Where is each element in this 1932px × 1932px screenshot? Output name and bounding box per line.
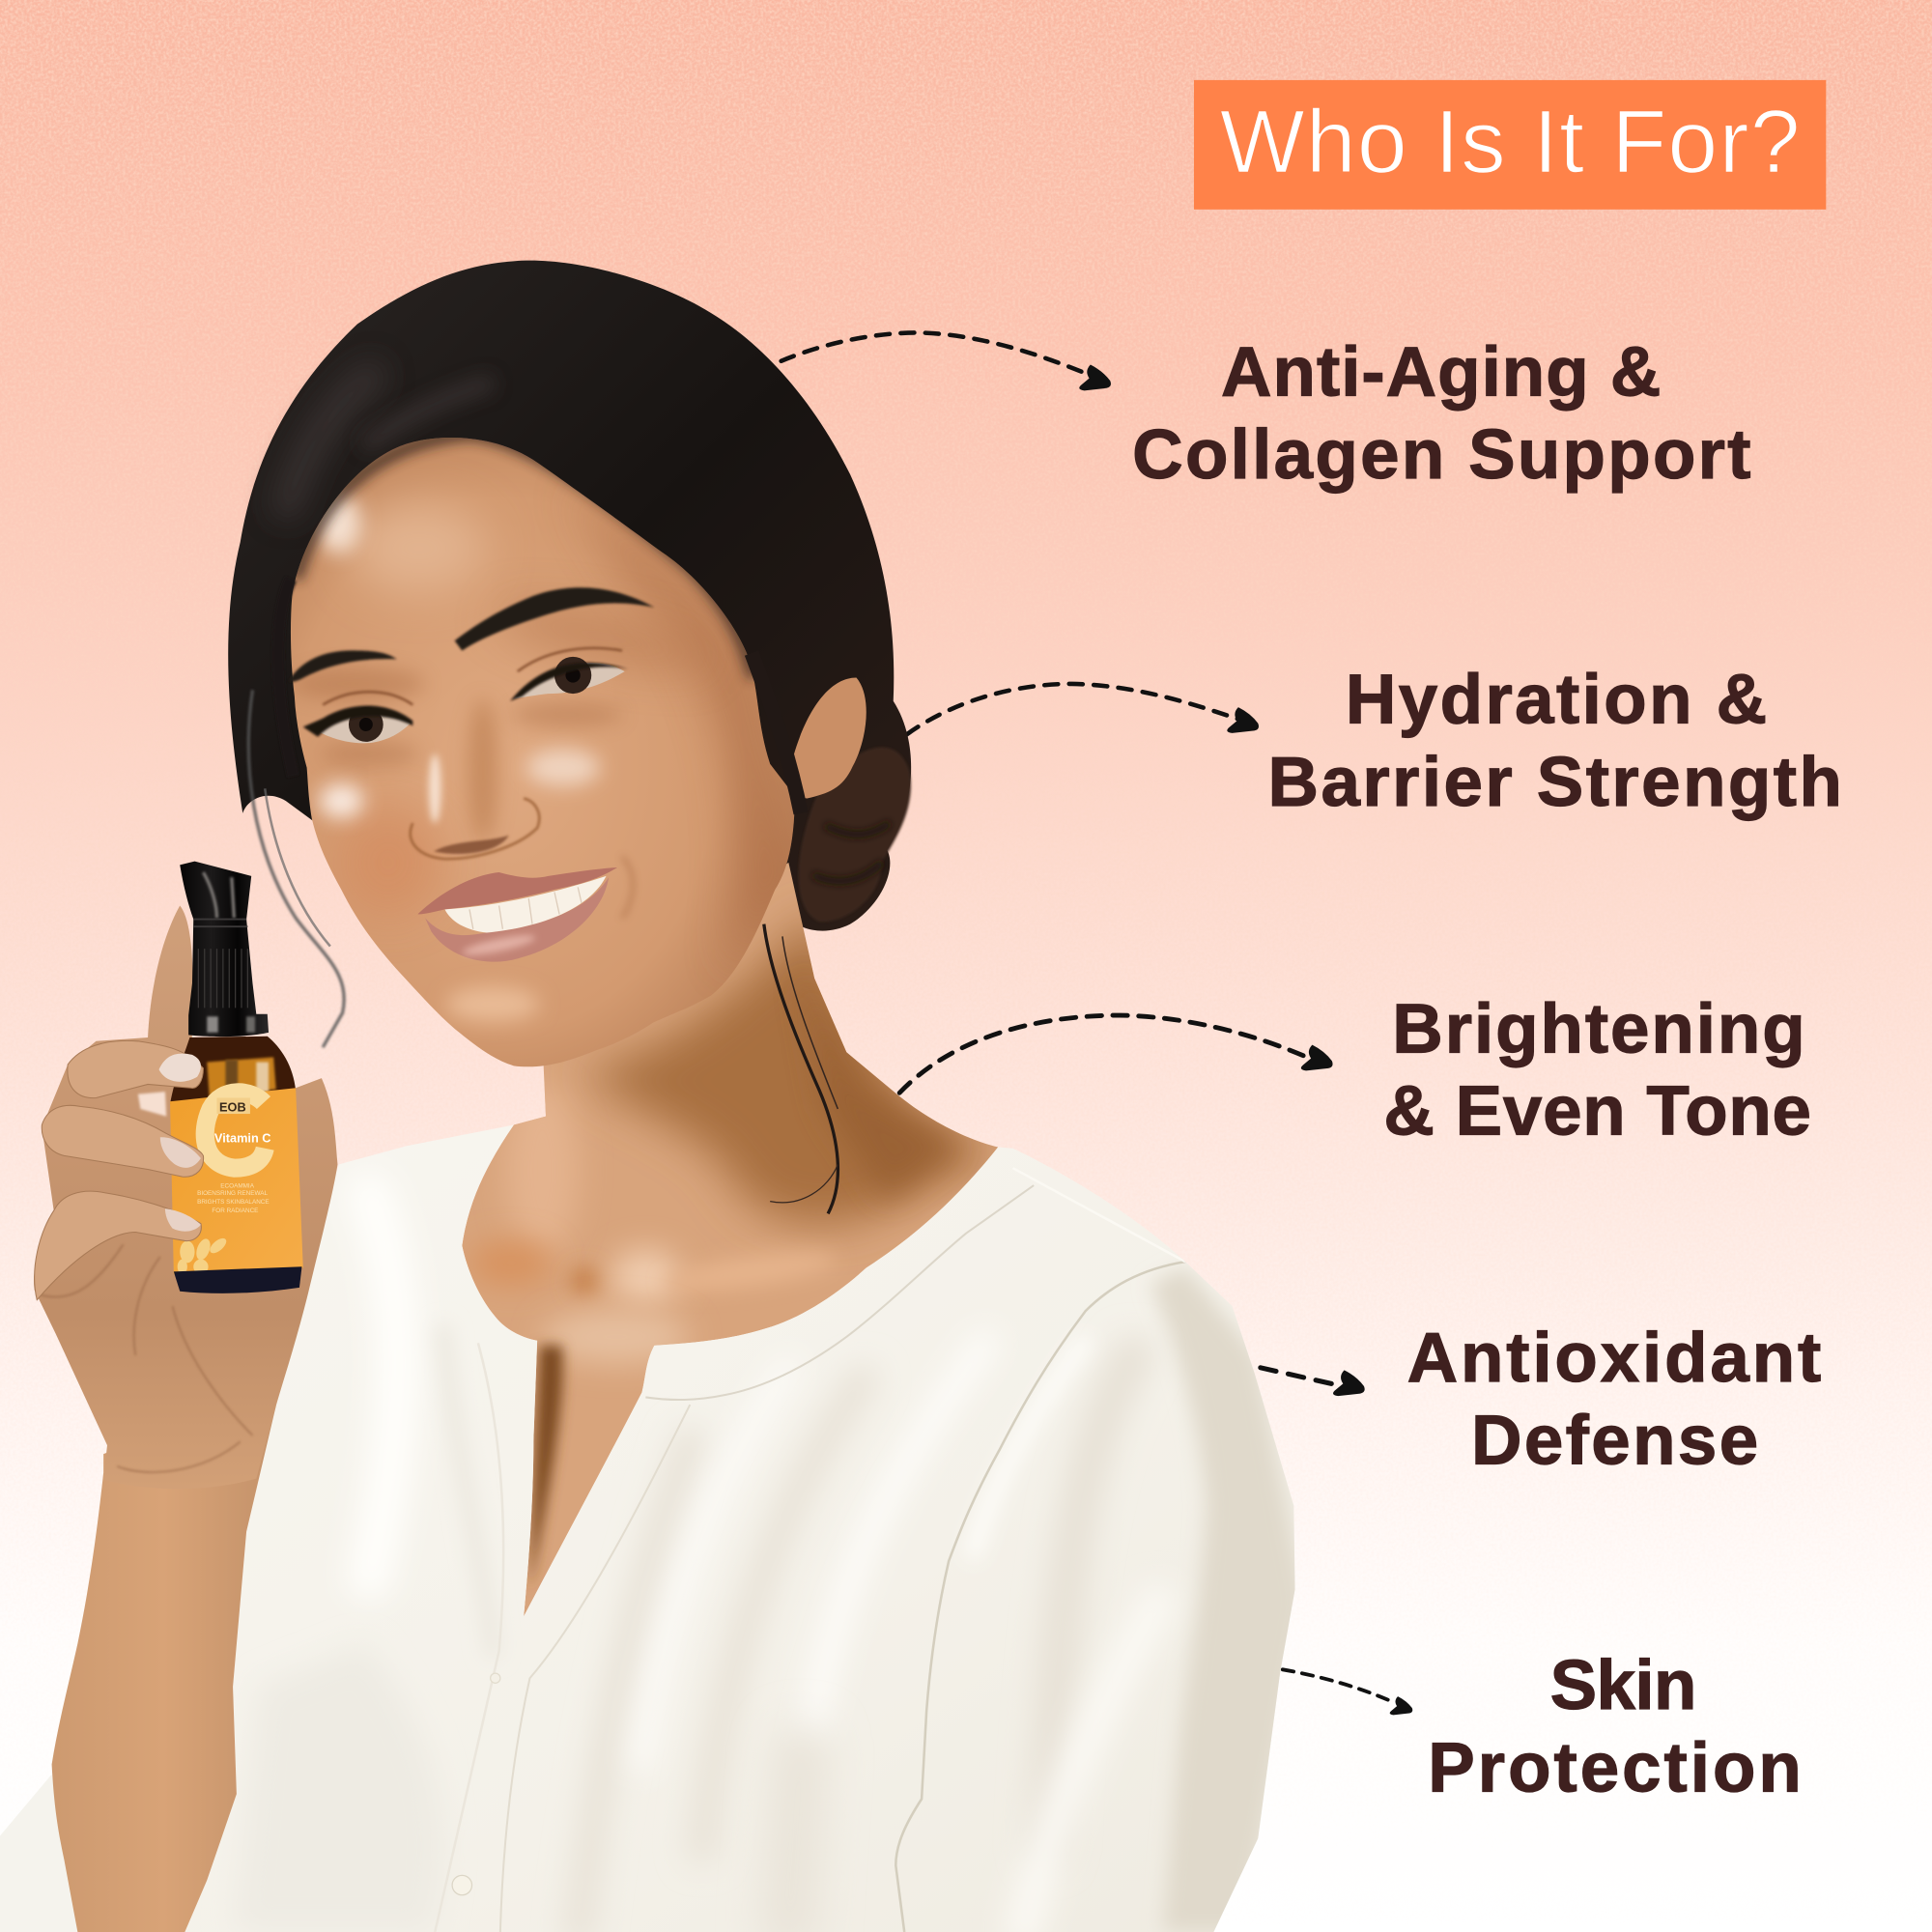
benefit: Brightening & Even Tone: & Even Tone [1383,1072,1811,1151]
fingernails [159,1054,201,1082]
benefit: Antioxidant Defense: Antioxidant [1407,1319,1821,1397]
label small print: ECOAMMIA [220,1183,255,1190]
arrow: to Skin Protection [1283,1669,1412,1715]
mouth and smile [417,867,617,962]
left eye [303,692,412,743]
serum bottle: Vitamin C [214,1130,271,1145]
arrow: to Antioxidant [1261,1368,1365,1396]
benefit: Antioxidant Defense [1407,1319,1821,1479]
benefit: Skin Protection: Protection [1428,1729,1802,1807]
label almond illustration [178,1236,229,1274]
hair and bun [228,261,911,931]
benefit: Antioxidant Defense: Defense [1471,1401,1758,1479]
benefit: Anti-Aging & Collagen Support [1132,332,1750,494]
hand and arm [34,906,337,1932]
arrow: to Brightening [899,1015,1333,1093]
eyebrows [288,587,654,682]
sleeve shaded back band [1151,1266,1306,1932]
bottle label [170,1088,303,1274]
benefit: Anti-Aging & Collagen Support: Anti-Aging & [1221,332,1661,411]
gap between fingers [138,1092,166,1117]
ear [788,678,867,799]
label small print [197,1183,270,1214]
face [288,434,801,1066]
neck and chest skin [462,863,998,1616]
left sleeve [0,1775,77,1932]
facial shading [567,487,801,974]
title badge: Who Is It For?: Who Is It For? [1220,92,1801,192]
right eye [510,648,629,701]
label small print: BRIGHTS SKINBALANCE [197,1199,270,1206]
benefit: Brightening & Even Tone: Brightening [1392,989,1805,1067]
serum bottle [170,862,303,1293]
woman holding serum bottle [0,261,1306,1932]
serum bottle: EOB [219,1100,246,1115]
benefit: Hydration & Barrier Strength: Barrier Strength [1267,743,1842,821]
nose [411,799,539,859]
benefit: Anti-Aging & Collagen Support: Collagen Support [1132,415,1750,494]
benefit: Skin Protection [1428,1646,1802,1807]
white linen shirt [0,1125,1306,1932]
benefit: Brightening & Even Tone [1383,989,1811,1151]
arrow: to Hydration [907,684,1259,734]
loose hair strands [248,579,838,1213]
label small print: FOR RADIANCE [212,1208,258,1214]
fingers [35,1040,204,1300]
label small print: BIOENSRING RENEWAL [197,1190,268,1197]
benefit: Skin Protection: Skin [1550,1646,1696,1724]
cloth shadows [274,1673,361,1743]
benefit: Hydration & Barrier Strength: Hydration & [1346,661,1767,739]
arrow: to Anti-Aging [781,332,1111,390]
seams and placket [435,1168,1185,1932]
shirt buttons [452,1673,500,1895]
benefit: Hydration & Barrier Strength [1267,661,1842,821]
